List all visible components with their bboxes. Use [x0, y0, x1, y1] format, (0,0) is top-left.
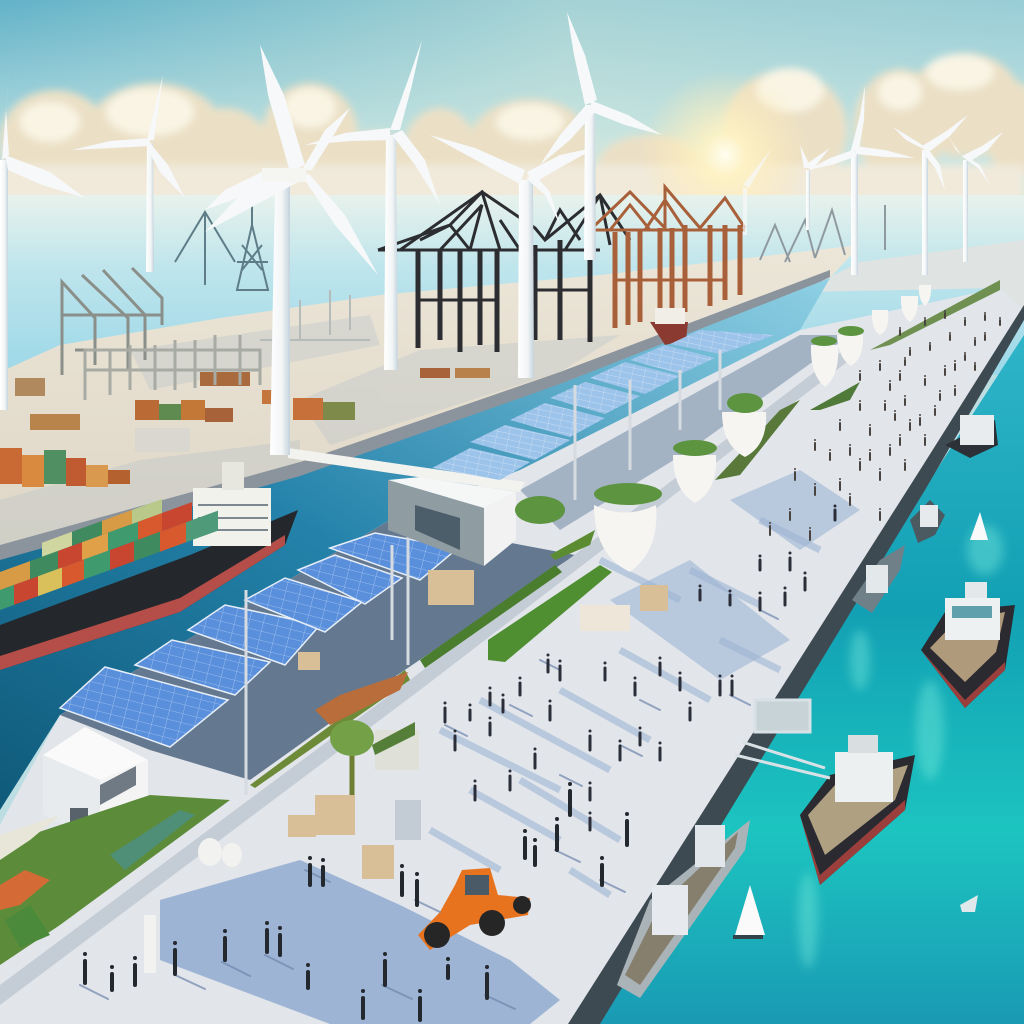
bridge across canal — [288, 448, 525, 492]
promenade streak shadows — [430, 520, 820, 895]
distant offshore crane — [175, 205, 268, 290]
far quay edge — [0, 270, 830, 562]
planters and green beds — [0, 280, 1000, 965]
shaded plaza with solar panels — [60, 520, 575, 780]
people shadows — [80, 610, 778, 1009]
sailboats — [733, 512, 988, 939]
central pier and promenade land — [0, 288, 1024, 1024]
sun — [640, 70, 810, 240]
small red ship in canal — [650, 308, 688, 345]
far right land — [800, 240, 1024, 310]
white utility building — [43, 727, 148, 843]
right ocean — [595, 335, 1024, 1024]
far quay shadows — [0, 315, 620, 545]
tree planter — [330, 720, 419, 795]
canal water — [0, 278, 830, 810]
people: midground — [445, 506, 835, 830]
cargo stacks on far quay — [0, 368, 490, 487]
planter foliage — [515, 326, 864, 524]
supply crates — [288, 570, 668, 879]
river walk divider — [0, 345, 860, 1005]
canal solar canopy — [432, 330, 775, 480]
solar panels on pier — [60, 533, 458, 747]
upper blue-shaded plaza strip — [520, 335, 850, 530]
clouds — [0, 53, 1024, 207]
glass building — [388, 477, 516, 566]
white spheres — [144, 838, 242, 973]
people: distant crowd — [770, 311, 1000, 540]
wind turbines — [0, 12, 1003, 455]
far distant cranes — [760, 205, 885, 262]
orange gantry cranes — [590, 187, 745, 328]
left pale cranes — [62, 268, 370, 400]
sky — [0, 0, 1024, 215]
far quay — [0, 245, 860, 552]
ocean glints — [798, 525, 1003, 968]
dark gantry cranes — [378, 192, 630, 352]
container ship — [0, 462, 298, 670]
far sea — [0, 195, 1024, 375]
gangway — [735, 700, 830, 778]
promenade shadows — [160, 470, 860, 1024]
white vase planters — [594, 285, 931, 572]
ships on the right — [617, 415, 1015, 998]
promenade sea wall — [568, 305, 1024, 1024]
orange loader — [418, 868, 531, 950]
solar poles — [246, 350, 720, 795]
people: foreground — [85, 784, 627, 1020]
